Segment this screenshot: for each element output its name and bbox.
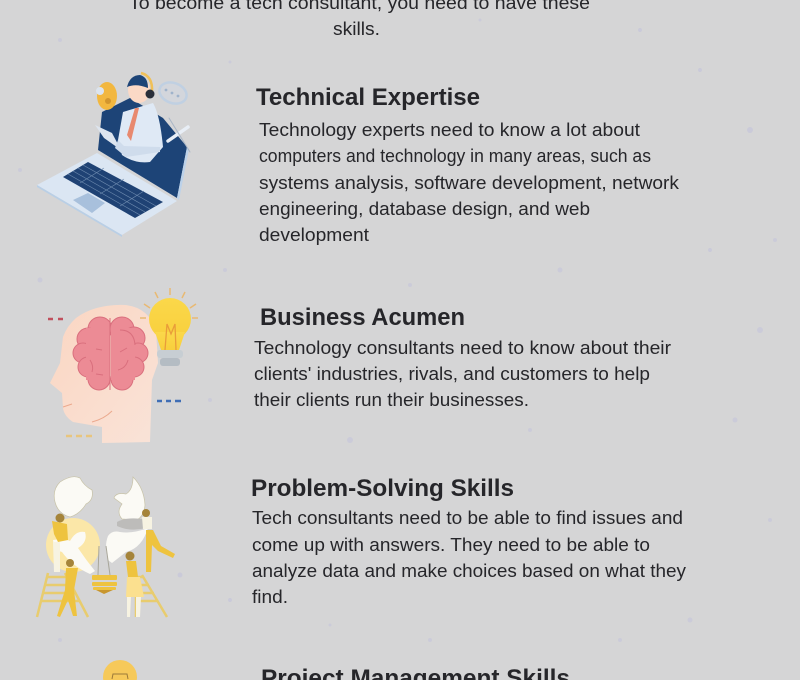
text: Problem-Solving description: find. xyxy=(252,586,288,607)
text: Business Acumen description xyxy=(254,337,671,410)
text: Problem-Solving description: analyze data and make choices based on what they xyxy=(252,560,687,581)
bulb base xyxy=(92,546,117,594)
ladders xyxy=(37,573,167,617)
people xyxy=(52,509,175,617)
text: Technical Expertise description: engineering, database design, and web xyxy=(259,198,590,219)
arm and tablet xyxy=(95,125,121,150)
laptop base xyxy=(37,153,177,235)
text: Technical Expertise description: computers and technology in many areas, such as xyxy=(259,145,651,166)
heading: Business Acumen: Business Acumen xyxy=(260,304,465,331)
wrench xyxy=(168,118,190,152)
light bulb xyxy=(140,288,198,366)
heading: Technical Expertise: Technical Expertise xyxy=(256,84,480,111)
laptop screen xyxy=(98,98,187,198)
dashes xyxy=(48,319,181,436)
intro text: skills. xyxy=(333,18,380,39)
text: Technical Expertise description xyxy=(259,119,680,245)
intro text xyxy=(129,0,590,39)
speech bubble xyxy=(156,79,190,107)
text: Technical Expertise description: systems analysis, software development, network xyxy=(259,172,680,193)
text: Business Acumen description: their clients run their businesses. xyxy=(254,389,529,410)
puzzle pieces xyxy=(54,477,92,517)
icon: people assembling puzzle light bulb xyxy=(37,477,175,617)
text: Problem-Solving description: come up with answers. They need to be able to xyxy=(252,534,650,555)
head silhouette xyxy=(50,305,158,443)
text: Problem-Solving description: Tech consultants need to be able to find issues and xyxy=(252,507,683,528)
icon: head with brain and light bulb xyxy=(48,288,198,443)
text: Business Acumen description: clients' industries, rivals, and customers to help xyxy=(254,363,650,384)
brain xyxy=(73,317,148,390)
keyboard xyxy=(63,162,163,218)
text: Technical Expertise description: development xyxy=(259,224,369,245)
text: Technical Expertise description: Technology experts need to know a lot about xyxy=(259,119,640,140)
head xyxy=(128,77,150,103)
icon: laptop with consultant xyxy=(37,73,190,237)
text: Business Acumen description: Technology consultants need to know about their xyxy=(254,337,671,358)
consultant body xyxy=(118,103,163,162)
text: Problem-Solving description xyxy=(252,507,687,607)
icon: project management partial xyxy=(103,660,137,680)
yellow globe behind xyxy=(46,518,100,572)
gear icon xyxy=(96,82,117,110)
heading: Problem-Solving Skills: Problem-Solving Skills xyxy=(251,475,514,502)
trackpad xyxy=(73,193,105,213)
